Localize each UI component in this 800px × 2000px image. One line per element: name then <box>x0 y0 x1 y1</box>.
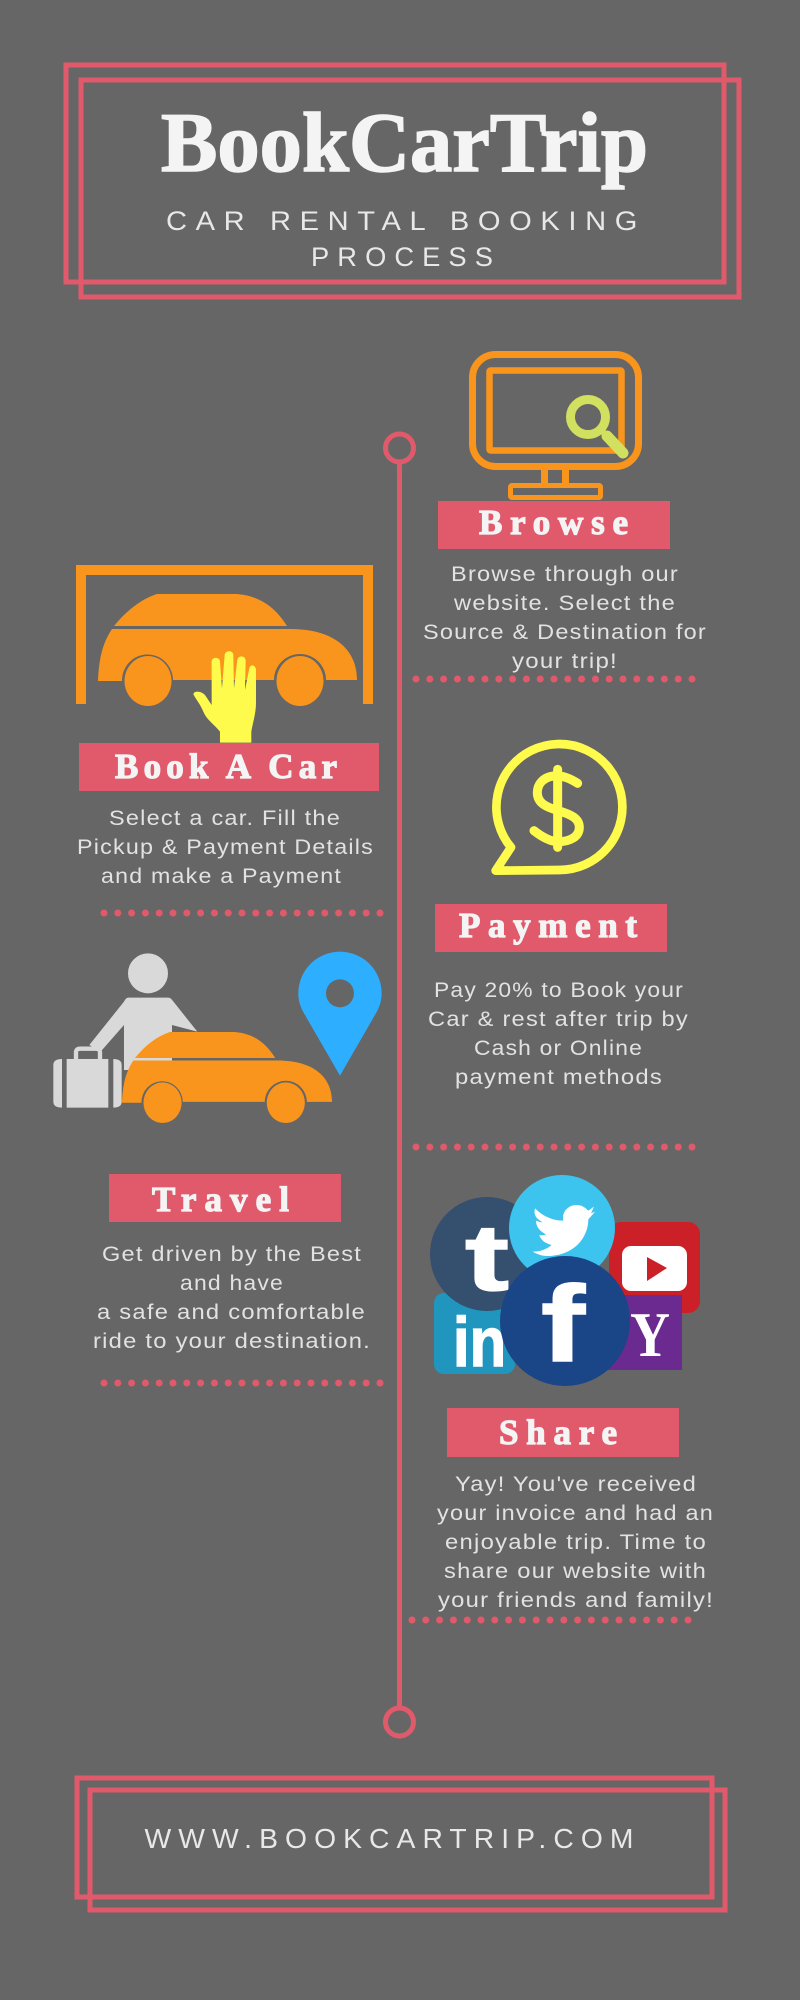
text: payment description: Cash or Online <box>474 1037 643 1060</box>
text: share description: enjoyable trip. Time to <box>445 1531 707 1554</box>
banner: Browse <box>438 501 670 549</box>
banner: Share: Share <box>499 1413 617 1452</box>
text: share description: share our website with <box>444 1560 707 1583</box>
banner: Payment <box>435 904 667 952</box>
icon: yahoo: Y <box>630 1299 670 1370</box>
panel: book a car <box>77 570 381 913</box>
text: book a car description <box>77 807 374 888</box>
subtitle <box>166 206 646 272</box>
icon: twitter <box>509 1175 615 1281</box>
panel: share <box>412 1175 714 1620</box>
banner: Share <box>447 1408 679 1457</box>
banner: Travel <box>109 1174 341 1222</box>
icon: dollar speech bubble <box>496 744 622 871</box>
text: share description: Yay! You've received <box>455 1473 697 1496</box>
icon: tumblr: t <box>465 1205 509 1310</box>
text: book a car description: Select a car. Fill the <box>109 807 341 830</box>
icon: social media cluster <box>430 1175 700 1386</box>
footer panel <box>77 1778 725 1910</box>
hand <box>193 651 256 743</box>
dotted divider <box>412 1616 689 1624</box>
text: payment description: payment methods <box>455 1066 663 1089</box>
website url: WWW.BOOKCARTRIP.COM <box>144 1823 640 1854</box>
title: BookCarTrip <box>161 96 648 190</box>
car <box>98 594 357 706</box>
person with suitcase <box>53 953 197 1108</box>
icon: linkedin <box>434 1293 515 1381</box>
panel: travel <box>53 952 382 1383</box>
text: book a car description: and make a Payment <box>101 865 342 888</box>
header panel <box>66 65 739 297</box>
dotted divider <box>416 676 693 682</box>
text: browse description <box>423 563 707 673</box>
subtitle: CAR RENTAL BOOKING <box>166 206 646 236</box>
text: travel description <box>93 1243 371 1353</box>
icon: monitor with magnifier <box>472 354 638 498</box>
text: travel description: ride to your destination. <box>93 1330 371 1353</box>
text: share description: your friends and family! <box>438 1589 714 1612</box>
text: browse description: Source & Destination for <box>423 621 707 644</box>
panel: payment <box>416 744 693 1147</box>
text: travel description: Get driven by the Best <box>102 1243 362 1266</box>
dotted divider <box>416 1144 693 1150</box>
icon: linkedin: in <box>453 1303 506 1381</box>
icon: facebook: f <box>541 1263 586 1384</box>
text: payment description <box>428 979 689 1089</box>
subtitle: PROCESS <box>311 242 501 272</box>
dotted divider <box>104 1380 381 1386</box>
icon: youtube <box>609 1222 700 1313</box>
icon: tumblr <box>430 1197 544 1311</box>
icon: car in garage with hand <box>81 570 368 743</box>
banner: Payment: Payment <box>459 906 637 945</box>
car <box>122 1032 332 1123</box>
map pin <box>298 952 382 1076</box>
text: browse description: your trip! <box>512 650 618 673</box>
text: payment description: Car & rest after trip by <box>428 1008 689 1031</box>
text: share description: your invoice and had an <box>437 1502 714 1525</box>
text: book a car description: Pickup & Payment Details <box>77 836 374 859</box>
icon: facebook <box>500 1256 630 1386</box>
banner: Browse: Browse <box>479 503 628 542</box>
text: browse description: Browse through our <box>451 563 679 586</box>
dotted divider <box>104 910 381 916</box>
text: browse description: website. Select the <box>453 592 676 615</box>
text: travel description: and have <box>180 1272 284 1295</box>
panel: browse <box>416 354 707 679</box>
text: payment description: Pay 20% to Book your <box>434 979 684 1002</box>
icon: yahoo <box>600 1295 682 1370</box>
icon: traveller, car and map pin <box>53 952 382 1123</box>
text: share description <box>437 1473 714 1612</box>
banner: Book A Car: Book A Car <box>115 747 337 786</box>
text: travel description: a safe and comfortable <box>97 1301 366 1324</box>
banner: Travel: Travel <box>152 1180 289 1219</box>
timeline <box>386 434 414 1736</box>
banner: Book A Car <box>79 743 379 791</box>
